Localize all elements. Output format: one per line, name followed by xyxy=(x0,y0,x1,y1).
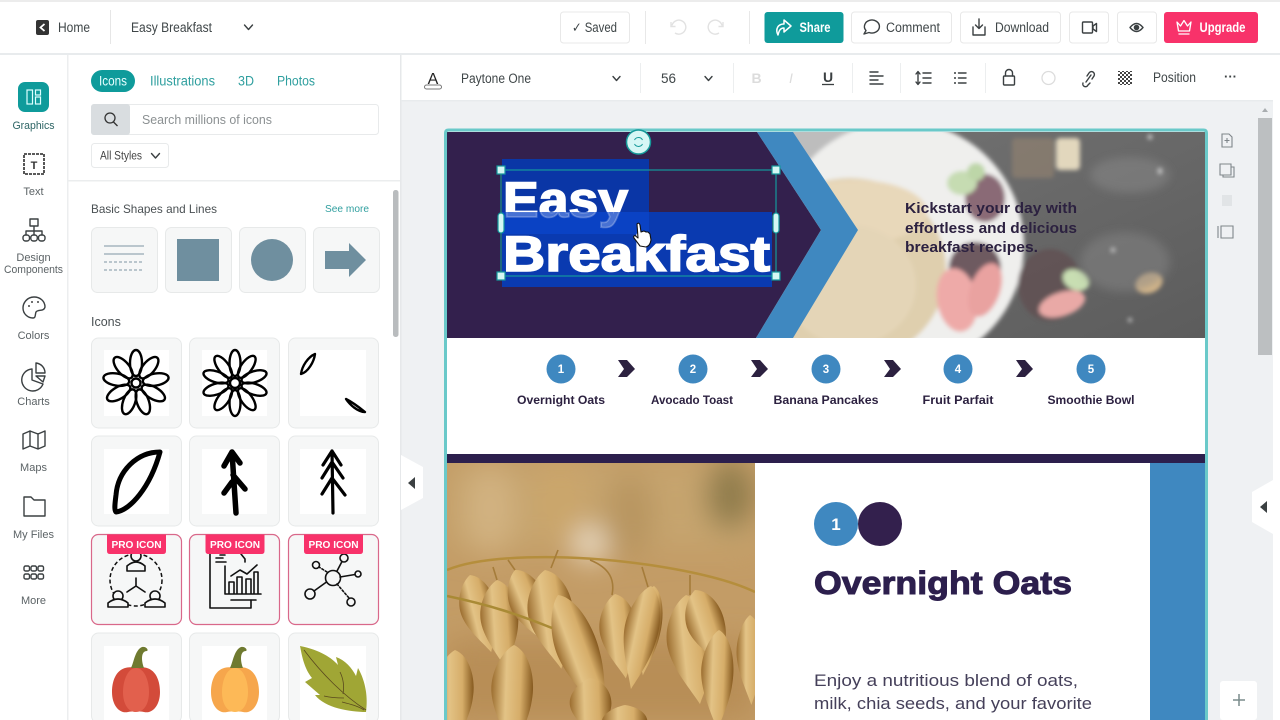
hero description: effortless and delicious xyxy=(905,220,1077,237)
home link xyxy=(36,20,90,35)
title line: Breakfast: Breakfast xyxy=(503,226,770,282)
recipe description: Enjoy a nutritious blend of oats, xyxy=(814,671,1078,690)
pro badge: PRO ICON xyxy=(210,540,260,551)
lock, link, transparency and position controls: ··· xyxy=(1224,69,1237,84)
collapse panel tab xyxy=(401,455,423,510)
more tab: More xyxy=(21,595,46,607)
maps tab xyxy=(20,431,47,474)
blue side stripe xyxy=(1150,463,1205,720)
arrow 2 xyxy=(751,360,768,377)
arrow 1 xyxy=(618,360,635,377)
icon tile: flower one xyxy=(92,338,182,428)
charts tab xyxy=(17,363,50,408)
style buttons: U xyxy=(823,69,833,85)
colors tab: Colors xyxy=(18,330,50,342)
category tabs: Illustrations xyxy=(150,74,215,88)
top navigation bar xyxy=(0,0,1280,55)
shape tile: arrow xyxy=(314,228,380,292)
step 4: 4 xyxy=(955,364,962,376)
hero description: breakfast recipes. xyxy=(905,239,1038,256)
pro badge: PRO ICON xyxy=(308,540,358,551)
step 5 xyxy=(1048,354,1134,407)
page tools column xyxy=(1218,134,1234,238)
video button xyxy=(1070,12,1108,43)
text box selection handles xyxy=(497,166,780,280)
canvas scrollbar xyxy=(1258,108,1272,355)
pro badge: PRO ICON xyxy=(112,540,162,551)
step 5: Smoothie Bowl xyxy=(1048,395,1134,407)
maps tab: Maps xyxy=(20,462,47,474)
saved button xyxy=(560,12,630,43)
font family dropdown xyxy=(461,71,620,86)
infographic page xyxy=(436,121,1205,720)
text tab: T xyxy=(31,160,38,172)
all styles dropdown xyxy=(92,144,168,168)
download button: Download xyxy=(995,20,1049,35)
recipe heading: Overnight Oats xyxy=(814,565,1072,601)
text selection highlight xyxy=(502,159,772,287)
text colour control xyxy=(424,71,442,89)
style buttons xyxy=(751,69,834,86)
my files tab xyxy=(13,497,54,541)
step 3: Banana Pancakes xyxy=(774,395,878,407)
font family dropdown: Paytone One xyxy=(461,71,531,86)
upgrade button: Upgrade xyxy=(1200,20,1246,35)
graphics tab xyxy=(12,82,55,132)
icons heading: Icons xyxy=(91,315,121,329)
category tabs: 3D xyxy=(238,74,254,88)
right edge panel xyxy=(1273,55,1280,720)
arrow 4 xyxy=(1016,360,1033,377)
step 4: Fruit Parfait xyxy=(922,395,994,407)
graphics side panel xyxy=(68,55,402,720)
arrow 3 xyxy=(884,360,901,377)
download button xyxy=(960,12,1060,43)
comment button xyxy=(852,12,952,43)
lock, link, transparency and position controls xyxy=(1004,69,1237,87)
text formatting toolbar xyxy=(401,63,1280,102)
number badge xyxy=(814,502,902,546)
style buttons: B xyxy=(751,70,762,86)
see more link: See more xyxy=(325,203,369,215)
step 1: 1 xyxy=(558,364,565,376)
icon tile: green leaf xyxy=(288,633,378,720)
icon tile: two leaves xyxy=(288,338,378,428)
charts tab: Charts xyxy=(17,396,50,408)
icon tile: orange pepper xyxy=(190,633,280,720)
comment button: Comment xyxy=(886,20,940,35)
recipe description: milk, chia seeds, and your favorite xyxy=(814,694,1092,713)
graphics tab: Graphics xyxy=(12,120,55,132)
pro icon tile: network xyxy=(288,534,378,624)
search box xyxy=(91,104,378,135)
undo and redo xyxy=(671,20,723,34)
alignment and list buttons xyxy=(870,72,966,84)
colors tab xyxy=(18,297,50,342)
design components tab xyxy=(4,219,63,276)
hero photo of pancakes xyxy=(757,132,1205,338)
canvas workspace background xyxy=(401,101,1273,720)
page selection border xyxy=(446,130,1206,720)
font size dropdown xyxy=(661,71,712,86)
text tab: Text xyxy=(23,186,44,198)
hero banner xyxy=(447,132,1205,338)
step 1 xyxy=(517,354,605,407)
search box: Search millions of icons xyxy=(142,112,272,127)
home link: Home xyxy=(58,20,90,35)
icon tile: red pepper xyxy=(92,633,182,720)
design components tab: Components xyxy=(4,264,63,276)
recipe steps row xyxy=(517,354,1134,407)
font size dropdown: 56 xyxy=(661,71,676,86)
my files tab: My Files xyxy=(13,529,54,541)
category tabs: Photos xyxy=(277,74,315,88)
text colour control: A xyxy=(428,71,439,88)
hero description: Kickstart your day with xyxy=(905,200,1077,217)
step 5: 5 xyxy=(1088,364,1095,376)
step 3 xyxy=(774,354,878,407)
category tabs: Icons xyxy=(99,74,127,88)
document title: Easy Breakfast xyxy=(131,20,212,35)
hero description xyxy=(905,200,1077,256)
all styles dropdown: All Styles xyxy=(100,150,142,162)
panel scrollbar xyxy=(393,190,398,337)
title line: Easy: Easy xyxy=(503,172,628,228)
step 1: Overnight Oats xyxy=(517,395,605,407)
icon tile: bold branch xyxy=(190,436,280,526)
left icon rail xyxy=(4,55,68,720)
style buttons: I xyxy=(789,70,793,86)
step 2 xyxy=(651,354,733,407)
lock, link, transparency and position controls: Position xyxy=(1153,70,1196,85)
share button: Share xyxy=(800,20,831,35)
design components tab: Design xyxy=(16,252,51,264)
recipe description xyxy=(814,671,1092,713)
saved button: ✓ Saved xyxy=(572,20,617,35)
dark title panel xyxy=(447,132,821,338)
step 4 xyxy=(922,354,994,407)
step 2: Avocado Toast xyxy=(651,395,733,407)
shape tile: circle xyxy=(240,228,306,292)
number badge: 1 xyxy=(831,515,841,534)
pro icon tile: team xyxy=(92,534,182,624)
step 3: 3 xyxy=(823,364,829,376)
basic shapes heading: Basic Shapes and Lines xyxy=(91,202,217,216)
more tab xyxy=(21,566,46,607)
recipe detail xyxy=(814,502,1092,713)
photo of oats xyxy=(436,455,763,720)
shape tile: lines xyxy=(92,228,158,292)
hand cursor xyxy=(634,223,651,247)
faded lower part of Easy: Easy xyxy=(503,172,628,228)
rotate handle xyxy=(626,130,650,154)
preview button xyxy=(1118,12,1156,43)
upgrade button xyxy=(1164,12,1258,43)
text tab xyxy=(23,154,44,198)
step 2: 2 xyxy=(690,364,696,376)
expand right panel tab xyxy=(1252,480,1273,534)
shape tile: square xyxy=(166,228,232,292)
section divider bar xyxy=(447,454,1205,463)
icon tile: thin branch xyxy=(288,436,378,526)
pro icon tile: report xyxy=(190,534,280,624)
icon tile: flower two xyxy=(190,338,280,428)
icon tile: bold leaf xyxy=(92,436,182,526)
blue chevron xyxy=(756,132,858,338)
share button xyxy=(764,12,844,43)
add page button xyxy=(1220,681,1257,720)
category tabs xyxy=(91,70,315,92)
